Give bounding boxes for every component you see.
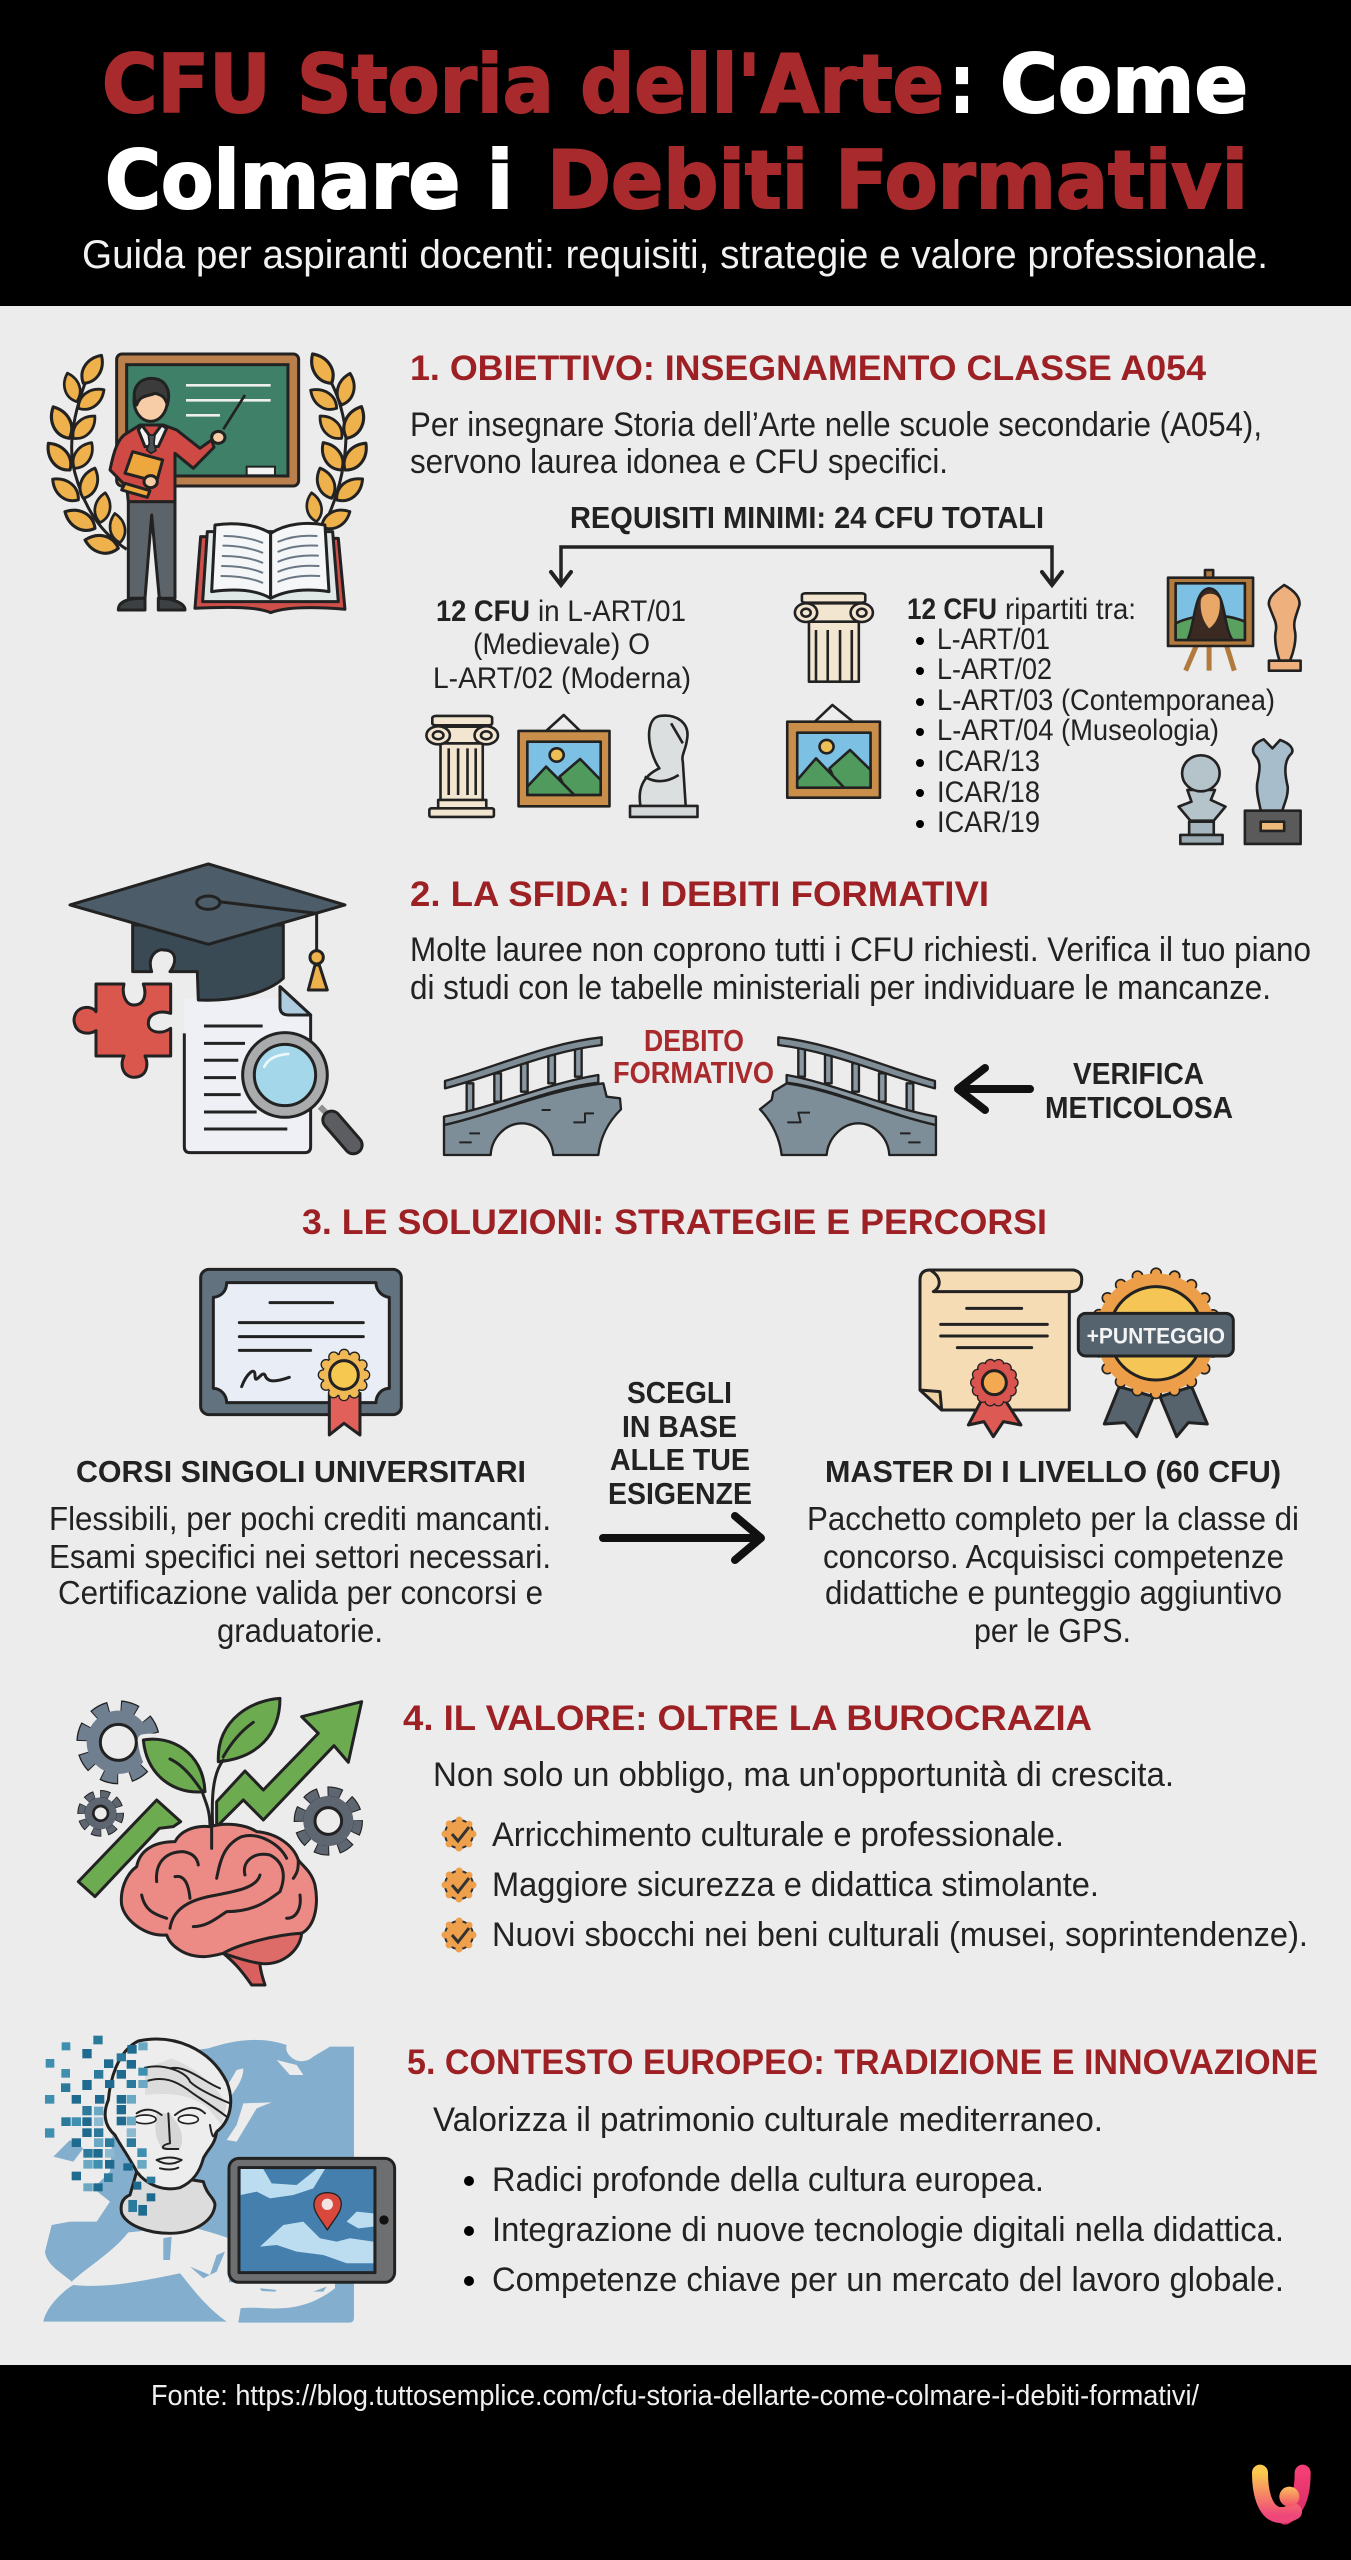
requirement: 12 CFU left: 12 CFU: [436, 595, 530, 628]
section 1 text: Per insegnare Storia dell’Arte nelle scuole secondarie (A054),: [410, 406, 1262, 444]
icon: painting left: [519, 715, 609, 806]
requirement: 12 CFU right list: L-ART/02: [937, 653, 1052, 686]
icon: mannequin: [1269, 585, 1301, 671]
footer: [0, 2365, 1351, 2560]
label: scegli in base alle tue esigenze: SCEGLI: [627, 1375, 732, 1410]
magnifier: [243, 1033, 353, 1145]
icon: bust right: [1179, 755, 1226, 844]
requirement: 12 CFU right list: ICAR/13: [937, 745, 1040, 778]
requirement: 12 CFU right list: L-ART/04 (Museologia): [937, 714, 1219, 747]
icon: portrait on easel: [1168, 570, 1253, 671]
course description: Certificazione valida per concorsi e: [58, 1574, 543, 1611]
medal: [1078, 1273, 1233, 1437]
label: debito formativo: FORMATIVO: [613, 1055, 774, 1090]
chalkboard: [117, 354, 299, 486]
course description: Flessibili, per pochi crediti mancanti.: [49, 1500, 551, 1537]
document: [184, 987, 311, 1153]
statue head: [105, 2039, 231, 2233]
section 1 heading: 1. OBIETTIVO: INSEGNAMENTO CLASSE A054: [410, 349, 1207, 388]
check item 2: Maggiore sicurezza e didattica stimolante.: [492, 1866, 1099, 1904]
source text: Fonte: https://blog.tuttosemplice.com/cfu-storia-dellarte-come-colmare-i-debiti-formativi/: [151, 2380, 1200, 2412]
requirement: 12 CFU left: [433, 595, 691, 695]
check item 3: Nuovi sbocchi nei beni culturali (musei, soprintendenze).: [492, 1916, 1308, 1954]
section 3 heading: 3. LE SOLUZIONI: STRATEGIE E PERCORSI: [302, 1203, 1047, 1242]
gears: [81, 1706, 358, 1850]
growth arrow: [78, 1702, 362, 1897]
master description: Pacchetto completo per la classe di: [807, 1500, 1299, 1537]
requirement: 12 CFU left: L-ART/02 (Moderna): [433, 662, 691, 695]
icon: brain with plant, gears and growth arrow: [78, 1698, 362, 1985]
section 2 heading: 2. LA SFIDA: I DEBITI FORMATIVI: [410, 875, 989, 914]
bullet list: [464, 2161, 1284, 2299]
section 5 heading: 5. CONTESTO EUROPEO: TRADIZIONE E INNOVAZIONE: [407, 2043, 1318, 2082]
left bridge half: [444, 1037, 621, 1155]
label: verifica meticolosa: METICOLOSA: [1045, 1090, 1233, 1125]
master title: MASTER DI I LIVELLO (60 CFU): [825, 1454, 1281, 1489]
brain: [121, 1824, 316, 1985]
requirement: 12 CFU left: (Medievale) O: [473, 628, 650, 661]
rosette seal: [323, 1354, 365, 1396]
label: scegli in base alle tue esigenze: IN BASE: [622, 1409, 737, 1444]
label: verifica meticolosa: [1045, 1056, 1233, 1125]
course title: CORSI SINGOLI UNIVERSITARI: [76, 1454, 526, 1489]
header band: [0, 0, 1351, 306]
icon: column right: [795, 593, 873, 682]
plant: [143, 1698, 280, 1828]
laurel wreath: [42, 349, 373, 557]
section 4 intro: Non solo un obbligo, ma un'opportunità di crescita.: [433, 1756, 1174, 1794]
label: debito formativo: DEBITO: [644, 1023, 744, 1058]
bullet list: Integrazione di nuove tecnologie digitali nella didattica.: [492, 2211, 1284, 2249]
requirement: 12 CFU right list: ICAR/19: [937, 806, 1040, 839]
title: CFU Storia dell'Arte: [102, 38, 944, 131]
check list: [445, 1816, 1308, 1954]
scroll: [920, 1270, 1082, 1437]
arrow: toward master: [603, 1516, 761, 1560]
requirements heading: REQUISITI MINIMI: 24 CFU TOTALI: [570, 500, 1044, 535]
title: [102, 38, 1248, 227]
title: Colmare i: [105, 134, 513, 227]
punteggio band: [1078, 1313, 1233, 1356]
label: debito formativo: [613, 1023, 774, 1090]
icon: classical statue, map of Europe and tablet: [43, 2036, 395, 2323]
right bridge half: [760, 1037, 936, 1155]
master description: [807, 1500, 1299, 1649]
title: Come: [1000, 38, 1248, 131]
section 5 intro: Valorizza il patrimonio culturale mediterraneo.: [433, 2101, 1103, 2139]
section 2 text: di studi con le tabelle ministeriali per individuare le mancanze.: [410, 969, 1271, 1007]
icon: column left: [426, 716, 498, 817]
open book: [195, 523, 345, 613]
puzzle piece: [74, 984, 171, 1077]
europe map: [43, 2040, 354, 2323]
punteggio band: +PUNTEGGIO: [1087, 1323, 1225, 1348]
icon: teacher with laurel and book: [42, 349, 373, 613]
course description: graduatorie.: [217, 1612, 383, 1649]
requirement: 12 CFU right list: L-ART/03 (Contemporanea): [937, 684, 1275, 717]
label: verifica meticolosa: VERIFICA: [1073, 1056, 1204, 1091]
icon: torso on pedestal: [1245, 739, 1301, 844]
logo: [1260, 2473, 1303, 2517]
digital pixels: [45, 2036, 155, 2216]
label: scegli in base alle tue esigenze: ESIGENZE: [608, 1476, 752, 1511]
graduation cap: [70, 864, 345, 1000]
bullet list: Competenze chiave per un mercato del lavoro globale.: [492, 2261, 1284, 2299]
master description: concorso. Acquisisci competenze: [823, 1538, 1284, 1575]
requirement: 12 CFU right list: L-ART/01: [937, 623, 1050, 656]
icon: bust left: [630, 716, 697, 817]
label: scegli in base alle tue esigenze: [608, 1375, 752, 1511]
section 1 text: [410, 406, 1262, 481]
icon: scroll and score medal: [920, 1270, 1233, 1437]
bullet list: Radici profonde della cultura europea.: [492, 2161, 1044, 2199]
section 1 text: servono laurea idonea e CFU specifici.: [410, 443, 948, 481]
requirement: 12 CFU right list: ripartiti tra:: [1005, 593, 1136, 626]
master description: per le GPS.: [974, 1612, 1131, 1649]
arrow: verification toward gap: [958, 1068, 1030, 1110]
master description: didattiche e punteggio aggiuntivo: [825, 1574, 1282, 1611]
title: Debiti Formativi: [547, 134, 1248, 227]
requirement: 12 CFU left: in L-ART/01: [538, 595, 686, 628]
teacher figure: [110, 378, 225, 610]
tablet: [229, 2158, 395, 2282]
title: :: [950, 38, 974, 131]
course description: Esami specifici nei settori necessari.: [49, 1538, 551, 1575]
icon: university certificate: [201, 1269, 401, 1435]
section 2 text: [410, 931, 1311, 1007]
arrow: bracket to two requirement branches: [551, 547, 1062, 585]
section 4 heading: 4. IL VALORE: OLTRE LA BUROCRAZIA: [403, 1699, 1092, 1738]
icon: broken bridge: [444, 1037, 936, 1155]
art icons: columns, paintings, busts: [426, 570, 1301, 844]
label: scegli in base alle tue esigenze: ALLE TUE: [610, 1442, 750, 1477]
check item 1: Arricchimento culturale e professionale.: [492, 1816, 1064, 1854]
requirement: 12 CFU right list: ICAR/18: [937, 776, 1040, 809]
requirement: 12 CFU right list: 12 CFU: [907, 593, 997, 626]
course description: [49, 1500, 551, 1649]
icon: painting right: [787, 705, 880, 798]
icon: graduation cap, puzzle piece, document and magnifier: [70, 864, 353, 1153]
subtitle: Guida per aspiranti docenti: requisiti, strategie e valore professionale.: [82, 233, 1268, 277]
requirement: 12 CFU right list: [907, 593, 1275, 839]
